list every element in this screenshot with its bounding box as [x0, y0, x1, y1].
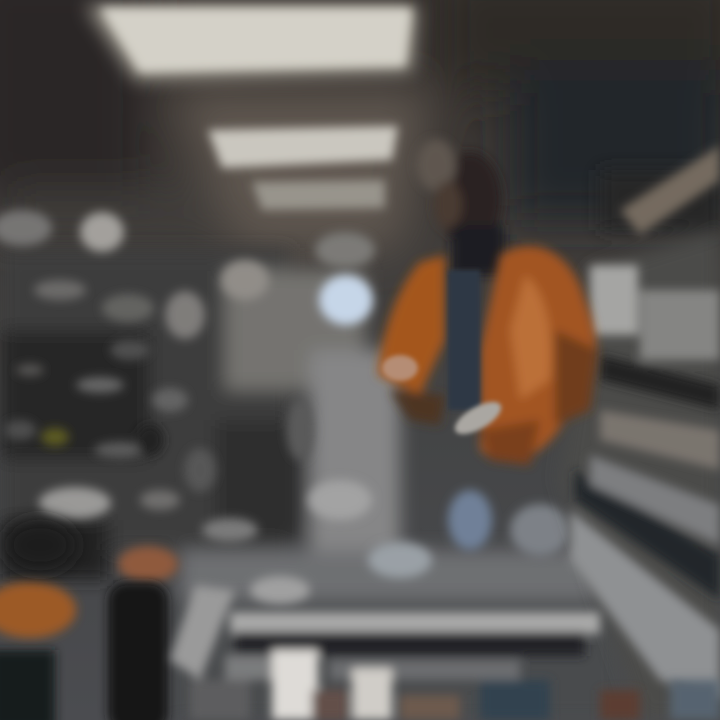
ceiling light 1: [85, 5, 418, 80]
hands: [382, 355, 506, 441]
ceiling light 2: [208, 126, 398, 168]
foreground shopper, bottom left: [0, 519, 178, 720]
right shelves: [560, 145, 720, 720]
shelf highlights: [0, 210, 570, 604]
head and hair: [416, 139, 504, 275]
foreground cart and products: [170, 585, 720, 720]
inner shirt: [448, 270, 480, 410]
ceiling: [0, 0, 720, 250]
bright window: [319, 275, 373, 325]
person in orange jacket: [378, 139, 598, 465]
left crowded shelves: [0, 250, 620, 720]
jacket: [378, 246, 598, 465]
ceiling light 3: [252, 180, 385, 210]
